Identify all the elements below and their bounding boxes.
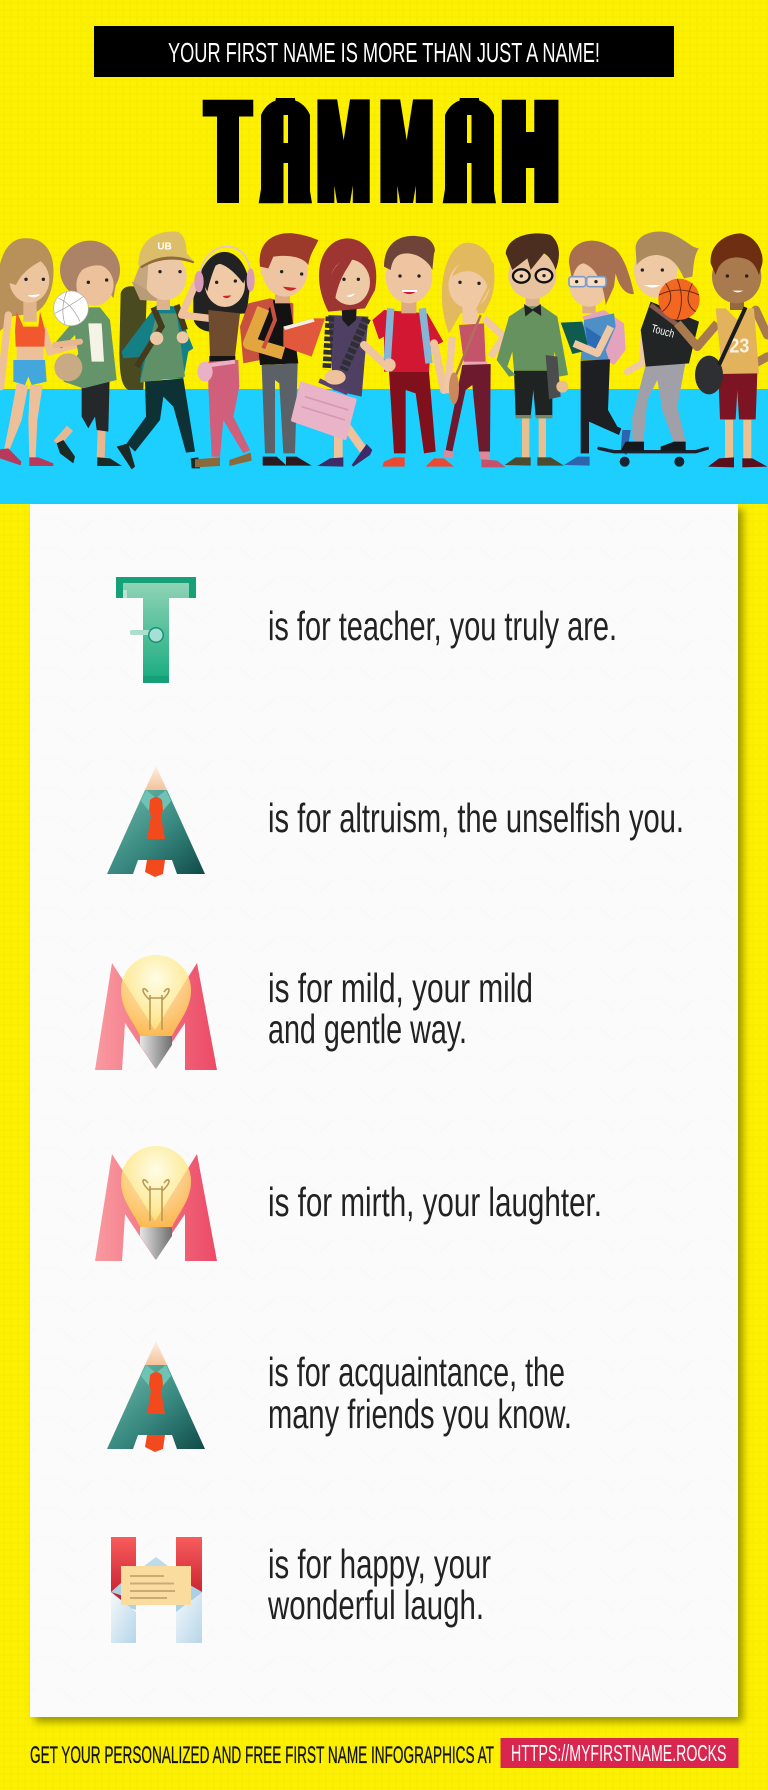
row A: pencil and tie icon xyxy=(107,766,205,877)
row A: text: many friends you know. xyxy=(268,1391,572,1437)
student 5: boy with book xyxy=(240,233,325,466)
student 12: boy in yellow tank: 23 xyxy=(729,336,749,358)
student 9: boy with glasses xyxy=(497,233,568,466)
title: name: A xyxy=(453,96,486,207)
white card panel xyxy=(30,504,738,1717)
title: name: M xyxy=(318,81,369,221)
row T: door icon xyxy=(116,577,196,683)
title: name: H xyxy=(504,85,557,217)
row T: text: is for teacher, you truly are. xyxy=(268,603,617,649)
crowd of students xyxy=(0,231,767,469)
student 12: boy in yellow tank xyxy=(695,233,767,467)
row M: text: is for mild, your mild xyxy=(268,965,533,1011)
row H: text: wonderful laugh. xyxy=(267,1582,484,1628)
student 11: skateboarder with basketball: Touch xyxy=(650,323,676,341)
row M: light bulb icon xyxy=(95,1146,217,1261)
row M: text: is for mirth, your laughter. xyxy=(268,1179,602,1225)
row H: text: is for happy, your xyxy=(268,1541,491,1587)
row A: text: is for acquaintance, the xyxy=(268,1349,565,1395)
student 7: boy in red shirt xyxy=(364,236,454,467)
title: name: T xyxy=(202,67,254,235)
title: name xyxy=(202,67,557,235)
title: name: A xyxy=(269,96,302,207)
row M: light bulb icon xyxy=(95,955,217,1070)
row M: text: and gentle way. xyxy=(268,1006,467,1052)
title: name: M xyxy=(381,81,432,221)
student 1: girl in orange top xyxy=(0,238,78,466)
student 2: girl with volleyball xyxy=(53,241,122,466)
row A: text xyxy=(268,1349,572,1437)
row H: envelope icon xyxy=(111,1537,202,1643)
row H: text xyxy=(267,1541,491,1628)
student 6: girl with pink bag xyxy=(293,238,376,467)
student 8: blonde girl xyxy=(442,243,506,467)
student 11: skateboarder with basketball xyxy=(599,231,717,467)
student 3: boy with cap and backpack: UB xyxy=(157,241,172,252)
row M: text xyxy=(268,965,533,1052)
top banner xyxy=(94,26,674,77)
cyan ground band xyxy=(0,389,768,504)
student 3: boy with cap and backpack xyxy=(117,231,200,469)
student 10: girl with tablet xyxy=(561,241,634,466)
student 4: girl with headphones xyxy=(182,247,255,467)
row A: pencil and tie icon xyxy=(107,1341,205,1452)
